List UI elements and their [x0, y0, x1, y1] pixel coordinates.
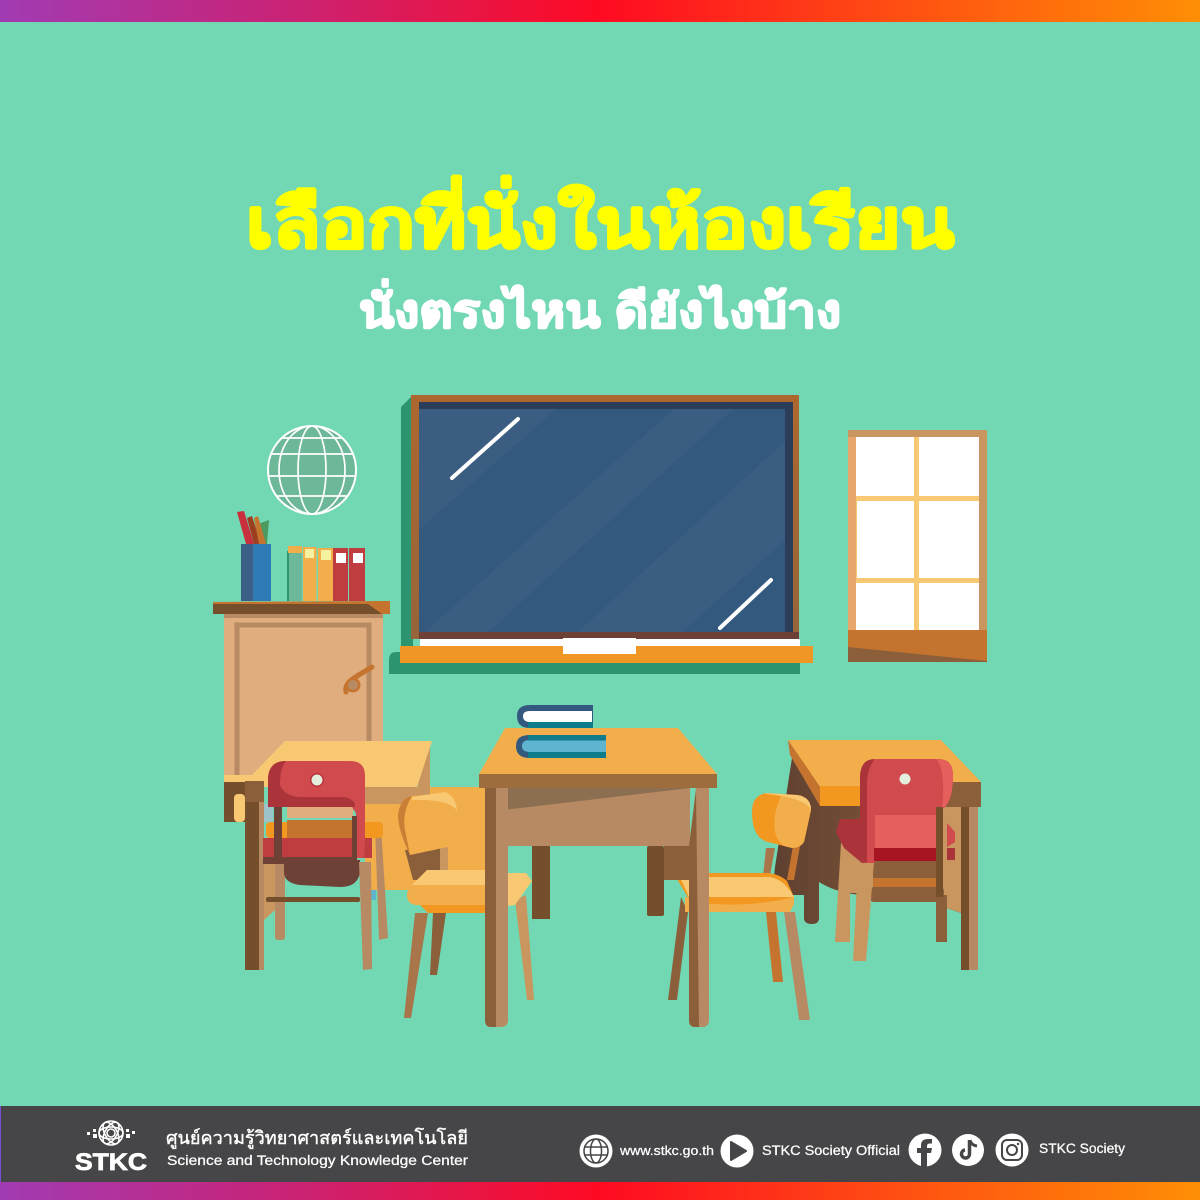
right yellow chair	[668, 793, 811, 1020]
left red chair	[263, 761, 388, 970]
subtitle: นั่งตรงไหน ดียังไงบ้าง	[359, 279, 841, 337]
chalk	[563, 638, 636, 654]
cabinet	[213, 601, 390, 822]
right red chair	[835, 759, 955, 961]
pen cup	[237, 511, 271, 601]
chalk mark: lower line	[720, 580, 771, 628]
icon: facebook	[908, 1134, 942, 1166]
icon: globe	[268, 426, 356, 514]
chalk mark: upper line	[452, 419, 518, 478]
icon: tiktok	[952, 1134, 984, 1166]
organisation name English: Science and Technology Knowledge Center	[167, 1153, 469, 1168]
youtube channel name: STKC Society Official	[762, 1143, 900, 1158]
blackboard	[389, 395, 813, 674]
website url: www.stkc.go.th	[619, 1143, 714, 1158]
books on cabinet	[287, 546, 365, 601]
center desk	[479, 705, 717, 1027]
title: เลือกที่นั่งในห้องเรียน	[246, 175, 954, 262]
footer band	[0, 1106, 1200, 1182]
top gradient bar	[0, 0, 1200, 22]
logo: STKC	[75, 1120, 147, 1176]
window	[848, 430, 987, 662]
left yellow chair	[398, 792, 534, 1018]
icon: website globe	[580, 1134, 612, 1168]
books on desk	[516, 705, 606, 758]
organisation name Thai: ศูนย์ความรู้วิทยาศาสตร์และเทคโนโลยี	[166, 1127, 468, 1149]
icon: instagram	[996, 1134, 1028, 1166]
left desk	[245, 741, 490, 970]
bottom gradient bar	[0, 1182, 1200, 1200]
logo: STKC: STKC	[75, 1149, 147, 1176]
icon: play button	[720, 1134, 754, 1168]
instagram account name: STKC Society	[1039, 1141, 1125, 1156]
right desk	[772, 740, 981, 970]
